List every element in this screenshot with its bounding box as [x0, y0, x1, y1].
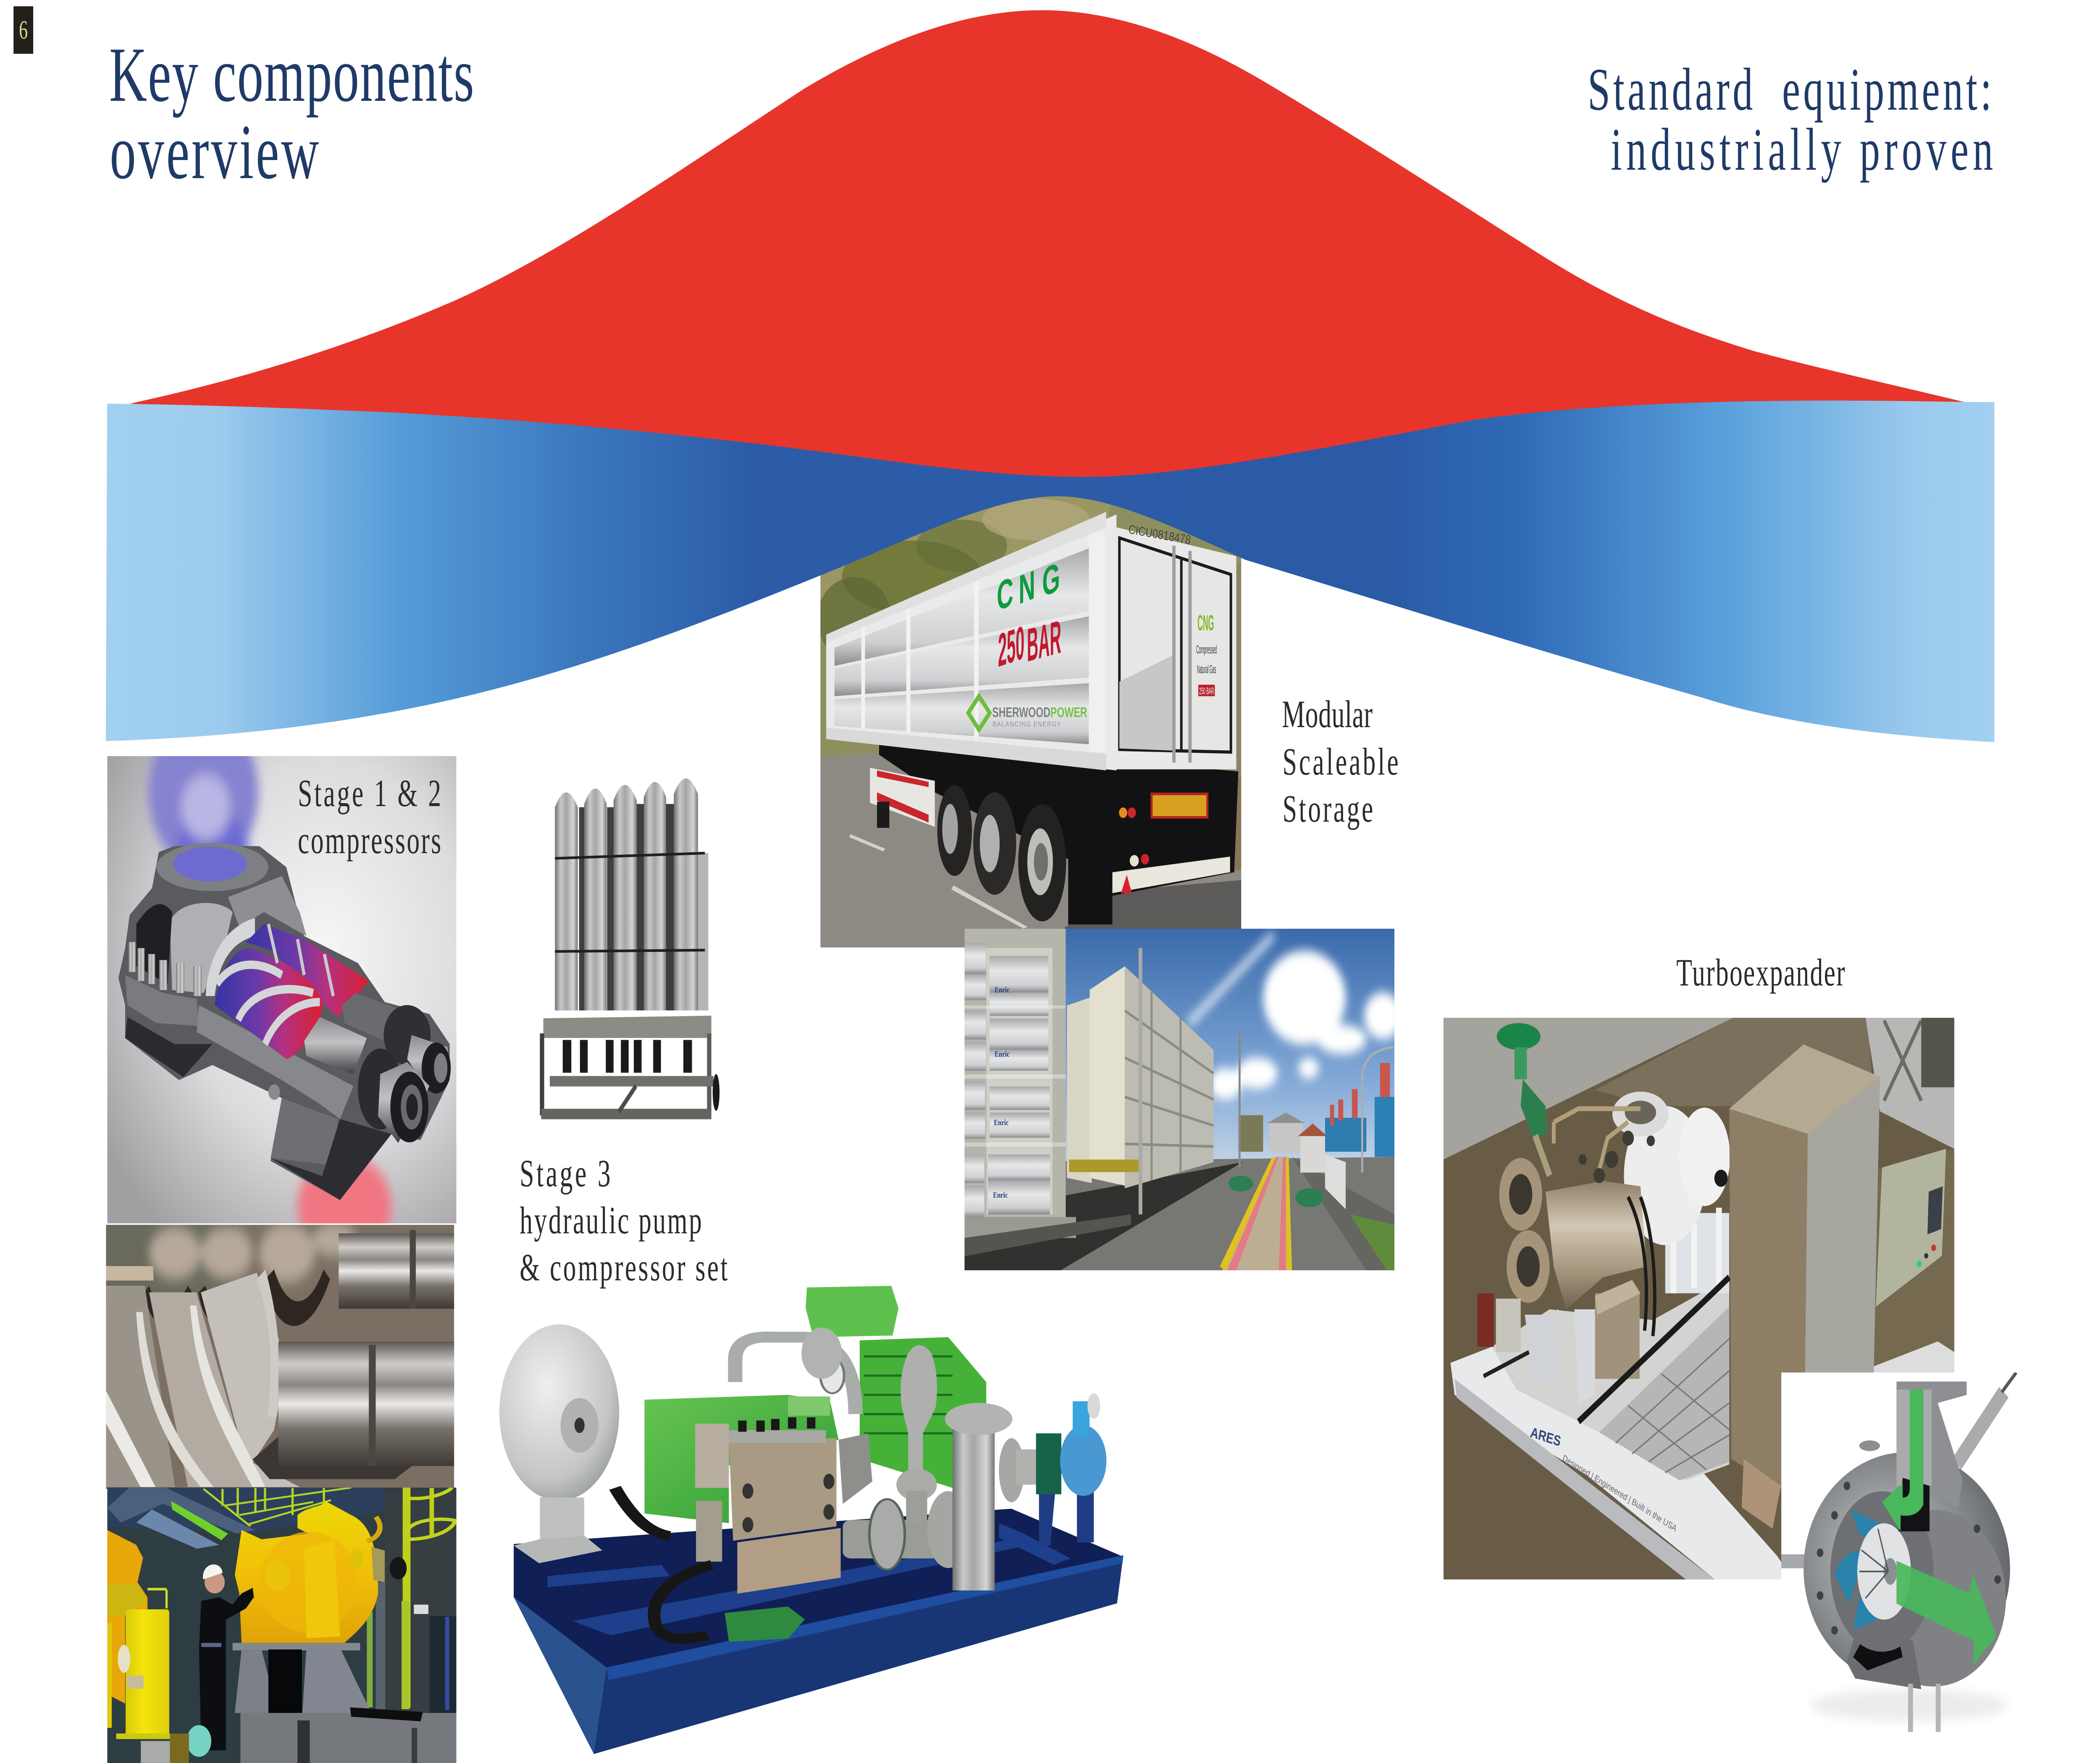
trailer lettering: SHERWOODPOWER: [992, 705, 1087, 720]
rotor helices: [106, 1269, 300, 1487]
subtitle: industrially proven: [1611, 116, 1993, 183]
walkway: [1222, 1157, 1288, 1270]
front cylinders: [555, 778, 698, 1010]
photo: screw compressor cutaway: [107, 714, 457, 1257]
label: modular storage: Scaleable: [1283, 740, 1399, 783]
rotors: [215, 924, 369, 1059]
title: overview: [110, 109, 319, 195]
title: [109, 32, 474, 195]
bolts: [1817, 1482, 2001, 1634]
label: stage 1 and 2: [298, 772, 441, 862]
pump head block: [695, 1417, 841, 1594]
title: Key components: [109, 32, 474, 118]
trailer tail lights and bumper: [1113, 794, 1230, 893]
blue frame: [514, 1484, 1124, 1754]
trailer lettering: CICU0818478: [1128, 522, 1192, 547]
green railings: [203, 1487, 351, 1526]
trailer lettering: CNG: [1197, 610, 1214, 635]
blue nozzle vanes: [1835, 1510, 1896, 1630]
blue inverse flow band: [106, 401, 1994, 742]
cylinder rack near: [965, 929, 1131, 1256]
photo: screw rotors close-up: [106, 1224, 454, 1489]
photo: CNG trailer storage: [817, 483, 1241, 948]
skid: Designed | Engineered | Built in the USA: [1561, 1453, 1678, 1534]
rear cylinders: [579, 804, 709, 1010]
photo: CNG trailer storage: Compressed: [1196, 644, 1217, 656]
green motor: [645, 1286, 986, 1523]
label: modular storage: [1282, 693, 1399, 830]
tube bank: [826, 512, 1116, 770]
stainless cabinet: [1729, 1045, 1880, 1529]
green control valve: [1497, 1023, 1550, 1176]
steel stands: [233, 1643, 457, 1763]
red bell curve: [130, 10, 1965, 481]
page number badge: 6: [19, 16, 28, 45]
photo: modular storage yard: [965, 929, 1402, 1270]
sensor probe: [1956, 1392, 2004, 1464]
cylinder racks far: [1067, 948, 1239, 1214]
subtitle: [1588, 56, 1993, 183]
trailer lettering: 250: [998, 615, 1024, 677]
trailer rear doors: [1106, 525, 1236, 769]
trailer lettering: C: [997, 568, 1013, 620]
photo: yellow compressor skid: [107, 1487, 457, 1763]
strainer: [945, 1393, 1106, 1590]
pipe arch: [735, 1337, 856, 1414]
photo: CNG trailer storage: Natural Gas: [1197, 663, 1216, 676]
subtitle: Standard equipment:: [1588, 56, 1992, 123]
skid: [1451, 1277, 1954, 1579]
photo: turboexpander cutaway inset: [1781, 1372, 2032, 1732]
shafts: [339, 1233, 454, 1309]
photo: hydraulic pump and compressor skid: [499, 1286, 1124, 1754]
label: stage 1 and 2: Stage 1 & 2: [298, 772, 441, 815]
air vessel: [499, 1324, 619, 1563]
trailer lettering: N: [1018, 561, 1035, 613]
cylinder rack near: Enric: [994, 1118, 1009, 1127]
control box: [1876, 1149, 1946, 1307]
wheels: [937, 785, 1066, 921]
cylinder rack near: Enric: [995, 1050, 1010, 1059]
green flow arrows: [1882, 1390, 1996, 1665]
cylinder rack near: Enric: [995, 985, 1010, 994]
clouds: [1187, 932, 1402, 1099]
page number badge: [13, 6, 33, 54]
trailer lettering: [968, 522, 1217, 730]
purple vapour: [149, 714, 258, 888]
trailer lettering: BALANCING ENERGY: [992, 720, 1061, 728]
power plant: [1238, 1047, 1394, 1209]
label: stage 3: & compressor set: [520, 1246, 728, 1289]
stainless turbine body: [1477, 1109, 1729, 1421]
trailer lettering: 250 BAR: [1199, 686, 1214, 696]
trailer undercarriage: [879, 739, 1238, 925]
photo: turboexpander skid: [1444, 1018, 1954, 1579]
label: modular storage: Modular: [1282, 693, 1373, 736]
shafts and flanges: [304, 993, 451, 1143]
white housing: [1612, 1092, 1730, 1293]
label: stage 3: Stage 3: [520, 1152, 611, 1195]
trailer lettering: BAR: [1027, 610, 1061, 672]
worker: [199, 1564, 254, 1750]
cylinder rack near: Enric: [993, 1191, 1008, 1200]
compressor housing: [118, 843, 450, 1200]
red vapour: [297, 1155, 391, 1257]
label: turboexpander: Turboexpander: [1676, 951, 1845, 994]
yellow machine: [235, 1501, 407, 1643]
accumulator: [900, 1345, 937, 1478]
label: stage 3: [520, 1152, 728, 1289]
yellow vessels: [107, 1530, 211, 1763]
photo: stage 3 buffer cylinders rack: [540, 778, 719, 1119]
hoses: [615, 1488, 712, 1639]
casing: [1803, 1382, 2010, 1689]
rack frame: [540, 1016, 719, 1119]
trailer lettering: G: [1042, 554, 1060, 606]
skid: ARES: [1529, 1424, 1562, 1450]
label: stage 3: hydraulic pump: [520, 1199, 702, 1242]
label: modular storage: Storage: [1283, 787, 1373, 830]
label: stage 1 and 2: compressors: [298, 819, 441, 862]
outlet manifold: [839, 1433, 969, 1570]
impeller: [1857, 1523, 1911, 1620]
